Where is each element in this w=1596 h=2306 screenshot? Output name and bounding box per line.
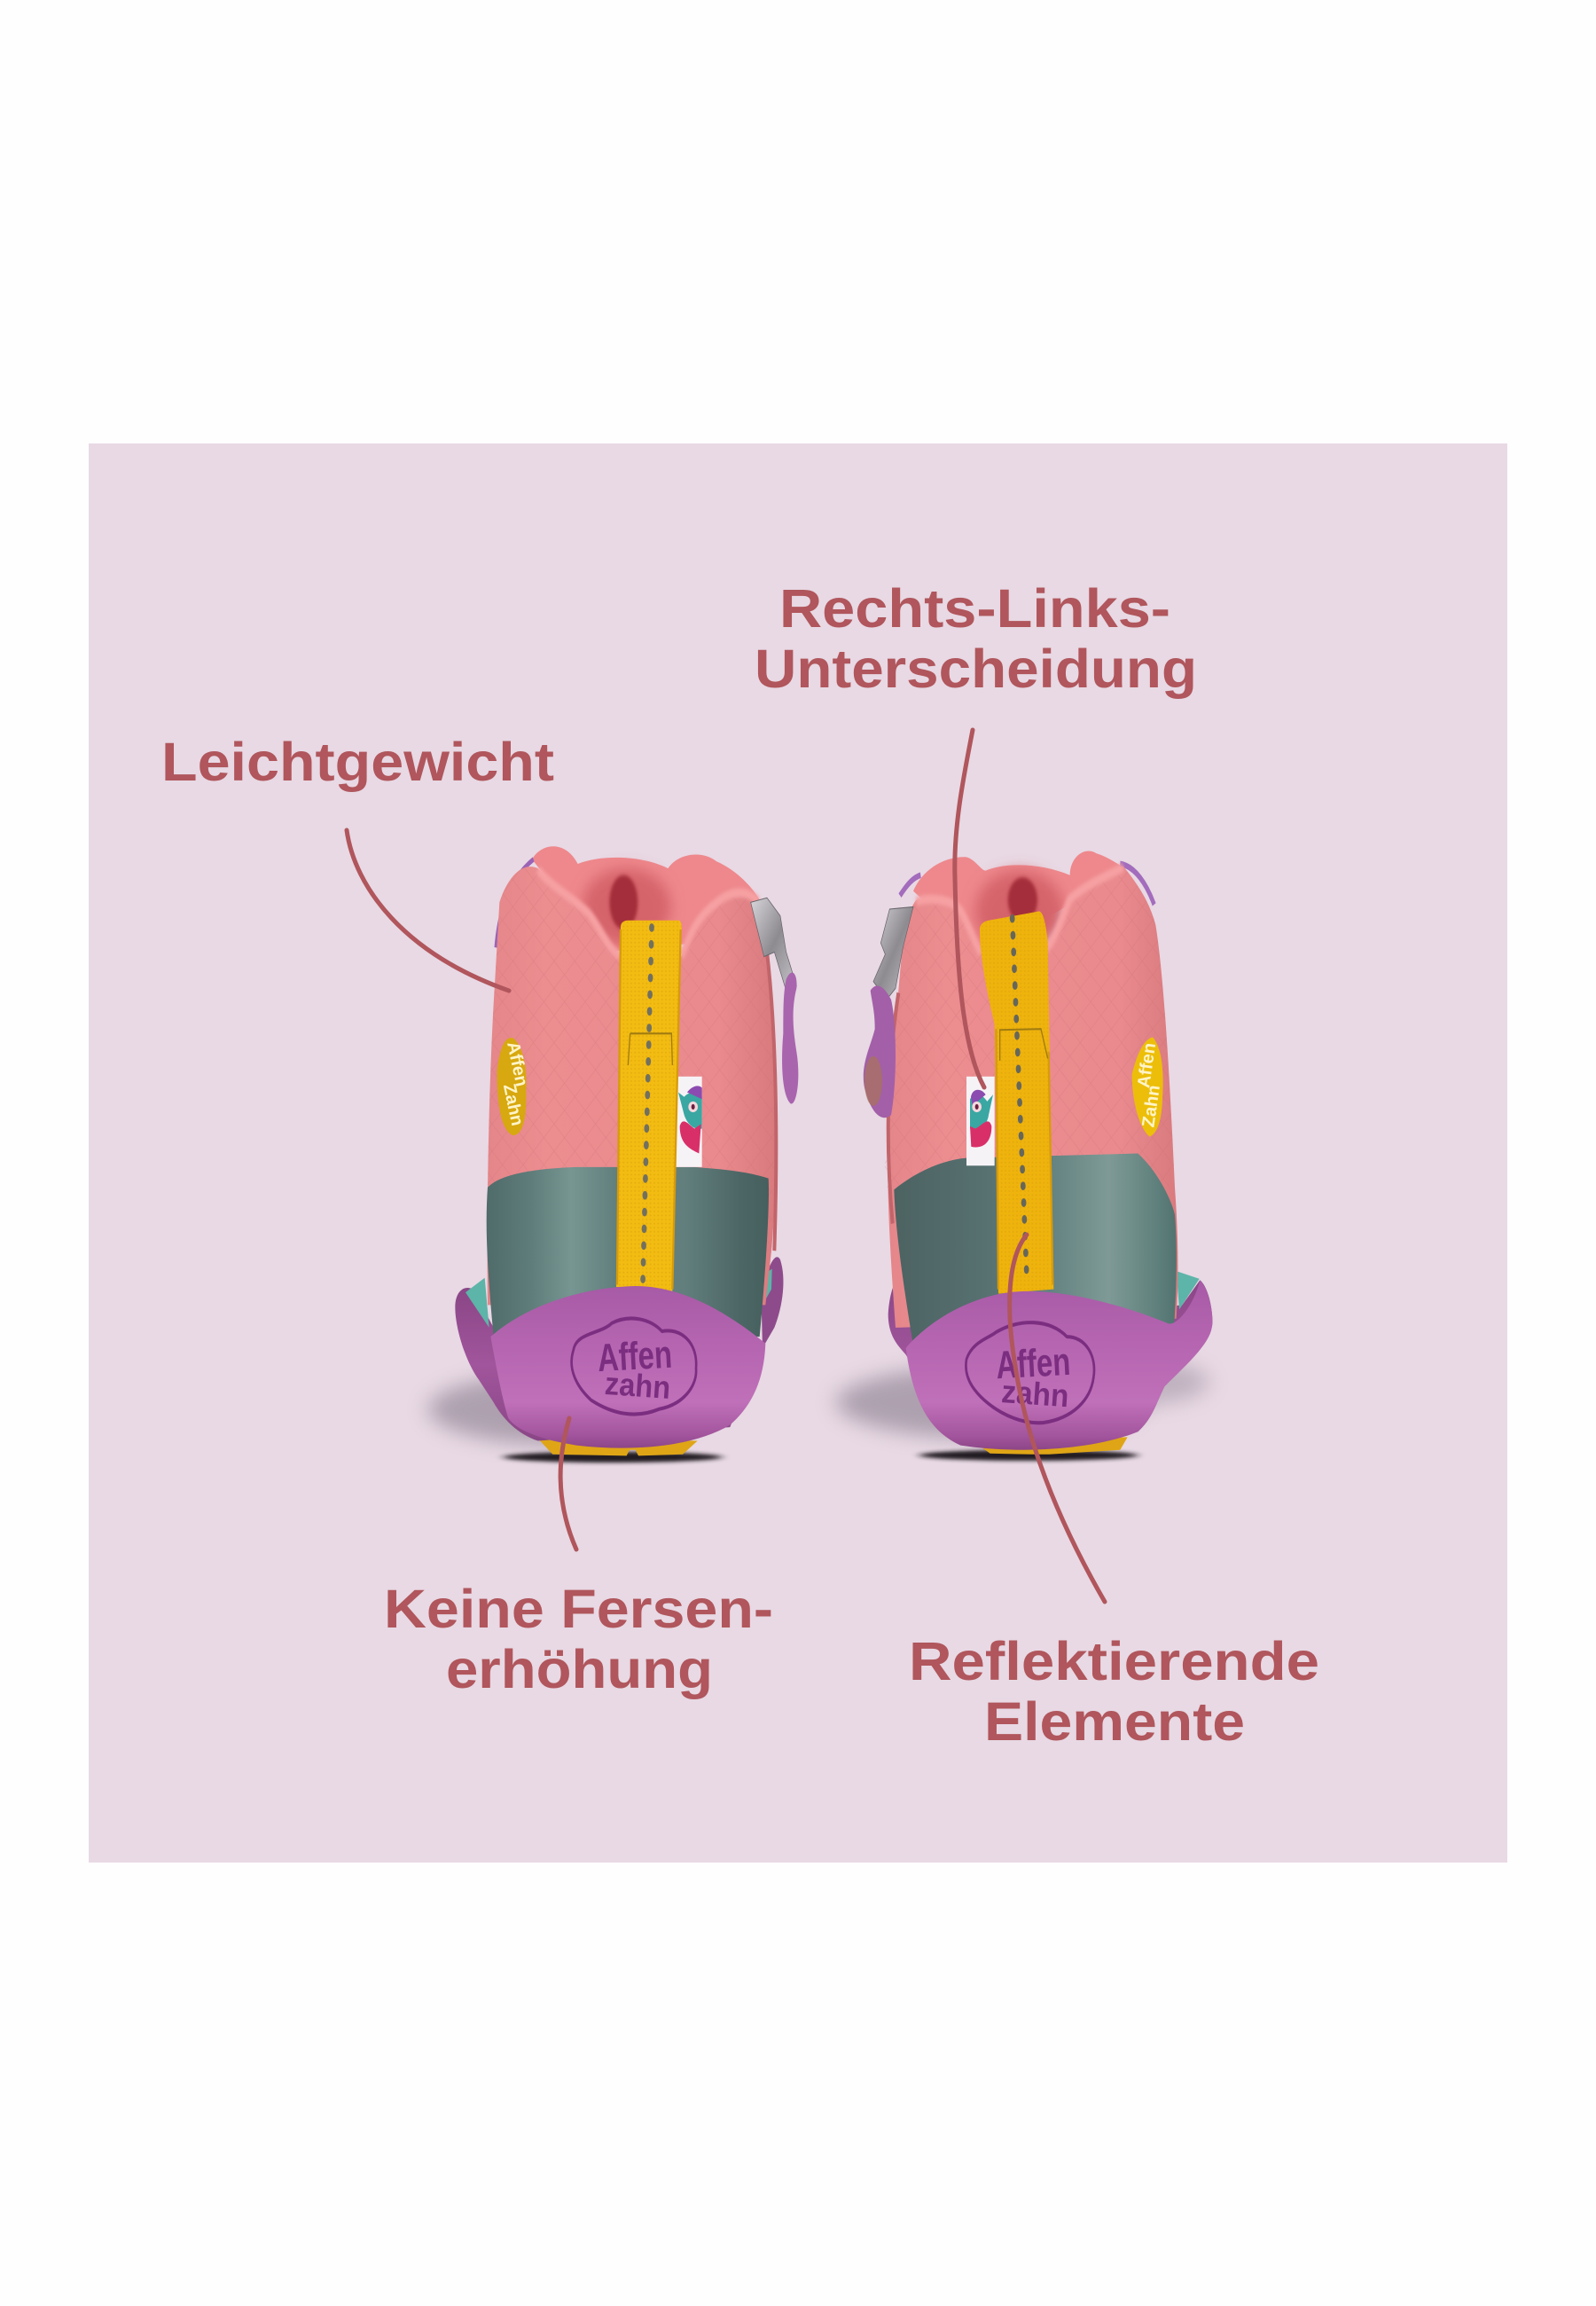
left boot woven label [676, 1077, 702, 1167]
left boot purple trim [496, 859, 534, 947]
left boot brand badge: Affen [503, 1040, 531, 1088]
right boot upper [888, 867, 1177, 1328]
label: Rechts-Links-Unterscheidung: Rechts-Links- [779, 578, 1170, 639]
right boot heel logo [966, 1322, 1094, 1423]
connector: Keine Fersenerhöhung [560, 1418, 576, 1549]
right boot zipper slider [873, 906, 913, 1000]
strap reflective stitching [1013, 918, 1027, 1284]
right boot collar opening [1008, 877, 1037, 922]
right boot yellow pull strap [980, 912, 1053, 1294]
right boot heel cup [906, 1280, 1213, 1450]
connector: Rechts-Links-Unterscheidung [955, 730, 984, 1087]
right boot collar lining [913, 851, 1123, 954]
background panel [89, 443, 1507, 1863]
left boot floor shadow [428, 1373, 700, 1446]
left boot brand badge [497, 1038, 531, 1135]
left boot zipper slider [751, 898, 796, 991]
connector: Reflektierende Elemente [1010, 1235, 1105, 1602]
right boot brand badge: Affen [1134, 1041, 1160, 1089]
right boot purple trim [900, 864, 1154, 905]
left boot right flange [761, 1257, 783, 1348]
label: Reflektierende Elemente: Reflektierende [909, 1631, 1319, 1691]
left boot zipper pull [782, 973, 798, 1104]
left boot collar shading [583, 868, 671, 945]
left boot heel cup [490, 1286, 765, 1448]
right boot yellow outsole [975, 1437, 1128, 1455]
right boot brand badge [1132, 1037, 1164, 1137]
right boot zipper [888, 992, 898, 1224]
left boot side sole [455, 1288, 763, 1440]
label: Keine Fersenerhöhung [384, 1579, 773, 1699]
right boot brand badge: Zahn [1138, 1084, 1164, 1128]
left boot yellow pull strap [616, 921, 682, 1291]
right boot floor shadow [836, 1366, 1144, 1439]
left boot upper [488, 867, 776, 1305]
label: Leichtgewicht: Leichtgewicht [161, 732, 554, 792]
right boot zipper pull [864, 985, 896, 1118]
label: Reflektierende Elemente [909, 1631, 1319, 1752]
left boot brand badge: Zahn [499, 1082, 527, 1127]
left boot heel logo: zahn [604, 1365, 672, 1406]
right boot reflective heel panel [894, 1154, 1177, 1345]
left boot teal midsole [466, 1269, 772, 1328]
left boot [428, 846, 798, 1463]
right boot [836, 851, 1213, 1461]
left boot collar rim [538, 870, 758, 957]
left boot collar lining [532, 846, 760, 952]
right boot heel logo: Affen [995, 1340, 1071, 1387]
label: Rechts-Links-Unterscheidung [755, 578, 1197, 699]
right boot side sole [888, 1278, 1212, 1443]
left boot collar opening [609, 875, 638, 929]
right boot teal midsole [898, 1271, 1200, 1328]
left boot heel logo: Affen [597, 1333, 673, 1380]
right boot woven label [966, 1077, 995, 1165]
label: Keine Fersenerhöhung: erhöhung [446, 1639, 713, 1699]
left boot heel logo [572, 1318, 696, 1415]
left boot yellow outsole [538, 1439, 698, 1455]
right boot collar shading [975, 871, 1064, 952]
left boot reflective heel panel [487, 1167, 769, 1337]
right boot collar rim [916, 867, 1123, 953]
strap reflective stitching [643, 927, 652, 1282]
connector: Leichtgewicht [347, 830, 509, 991]
label: Reflektierende Elemente: Elemente [984, 1691, 1245, 1752]
right boot heel logo: zahn [1000, 1373, 1070, 1414]
left boot zipper [767, 952, 776, 1251]
label: Rechts-Links-Unterscheidung: Unterscheidung [755, 639, 1197, 699]
label: Keine Fersenerhöhung: Keine Fersen- [384, 1579, 773, 1639]
